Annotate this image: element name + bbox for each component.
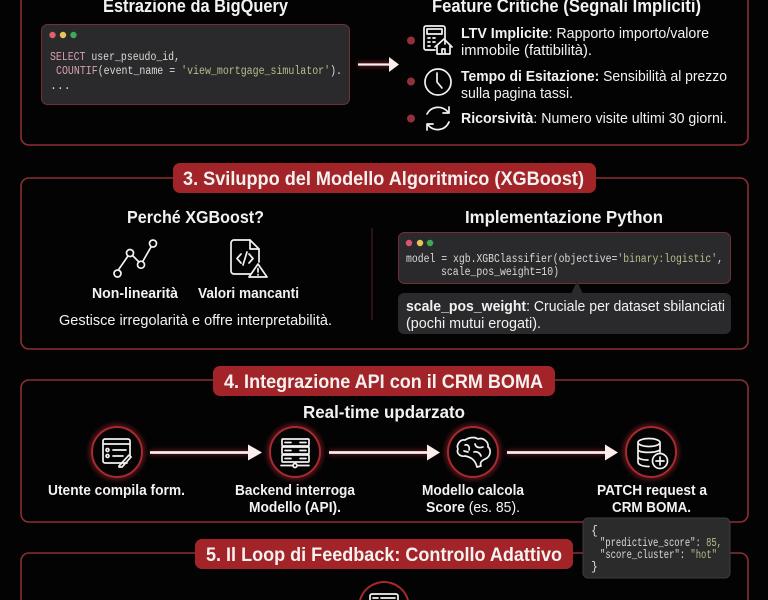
feature: LTV Implicite: immobile (fattibilità). bbox=[461, 43, 592, 59]
feature: Ricorsività: Ricorsività: Numero visite ultimi 30 giorni. bbox=[461, 111, 727, 127]
step: user form bbox=[48, 426, 185, 499]
icon: non-linear line chart bbox=[114, 240, 156, 277]
code window: JSON payload: "predictive_score": 85, bbox=[600, 537, 722, 550]
code window: BigQuery SQL: SELECT user_pseudo_id, bbox=[50, 51, 180, 64]
feature: LTV Implicite bbox=[407, 26, 709, 59]
step: model score: Modello calcola bbox=[422, 483, 525, 499]
code window: JSON payload: } bbox=[591, 561, 598, 574]
code window: Python: model = xgb.XGBClassifier(objective='binary:logistic', bbox=[406, 253, 723, 266]
feature: Tempo di Esitazione: sulla pagina tassi. bbox=[461, 86, 573, 102]
step: model score: Score (es. 85). bbox=[426, 500, 520, 516]
arrow: code to features bbox=[358, 57, 399, 72]
callout: scale_pos_weight bbox=[398, 281, 731, 334]
label: Valori mancanti: Valori mancanti bbox=[198, 286, 299, 302]
label: Non-linearità: Non-linearità bbox=[92, 286, 179, 302]
callout: scale_pos_weight: (pochi mutui erogati). bbox=[406, 315, 541, 332]
heading: Perché XGBoost: Perché XGBoost? bbox=[127, 207, 264, 227]
icon: feedback loop step, cropped bbox=[360, 582, 408, 600]
step: backend: Backend interroga bbox=[235, 483, 356, 499]
feature: LTV Implicite: LTV Implicite: Rapporto importo/valore bbox=[461, 26, 709, 42]
code window: Python: scale_pos_weight=10) bbox=[441, 266, 559, 279]
feature: Tempo di Esitazione: Tempo di Esitazione: Sensibilità al prezzo bbox=[461, 69, 727, 85]
code window: BigQuery SQL bbox=[42, 24, 350, 104]
code window: Python bbox=[398, 232, 730, 284]
icon: code document with warning bbox=[231, 240, 267, 277]
code window: BigQuery SQL: ... bbox=[50, 80, 71, 93]
code window: JSON payload: "score_cluster": "hot" bbox=[600, 549, 717, 562]
step: CRM patch: PATCH request a bbox=[597, 483, 708, 499]
title pill: section 3 bbox=[173, 163, 596, 193]
step: model score bbox=[422, 426, 525, 516]
title pill: section 5: 5. Il Loop di Feedback: Controllo Adattivo bbox=[206, 545, 562, 566]
text: XGBoost benefit: Gestisce irregolarità e offre interpretabilità. bbox=[59, 313, 332, 329]
panel: section 5 feedback loop bbox=[21, 539, 748, 600]
step: user form: Utente compila form. bbox=[48, 483, 185, 499]
panel: section 4 API integration bbox=[21, 366, 748, 522]
callout: scale_pos_weight: scale_pos_weight: Cruciale per dataset sbilanciati bbox=[406, 298, 725, 315]
title pill: section 3: 3. Sviluppo del Modello Algoritmico (XGBoost) bbox=[183, 169, 584, 190]
step: backend bbox=[235, 426, 356, 516]
panel: section 2 data extraction bbox=[21, 0, 748, 145]
heading: Implementazione Python: Implementazione Python bbox=[465, 207, 663, 227]
title pill: section 5 bbox=[195, 539, 573, 569]
arrow: model to CRM bbox=[507, 444, 618, 460]
panel: section 3 algorithmic model bbox=[21, 163, 748, 349]
step: CRM patch bbox=[597, 426, 708, 516]
step: CRM patch: CRM BOMA. bbox=[612, 500, 691, 516]
code window: BigQuery SQL: COUNTIF(event_name = 'view_mortgage_simulator'). bbox=[56, 65, 342, 78]
heading: Real-time: Real-time updarzato bbox=[303, 402, 465, 422]
code window: JSON payload: { bbox=[591, 525, 598, 538]
feature: Tempo di Esitazione bbox=[407, 69, 727, 102]
title pill: section 4: 4. Integrazione API con il CRM BOMA bbox=[224, 372, 543, 393]
arrow: backend to model bbox=[329, 444, 440, 460]
feature: Ricorsività bbox=[407, 107, 727, 130]
title pill: section 4 bbox=[213, 366, 555, 396]
step: backend: Modello (API). bbox=[249, 500, 341, 516]
arrow: form to backend bbox=[150, 444, 262, 460]
code window: JSON payload bbox=[583, 518, 730, 578]
